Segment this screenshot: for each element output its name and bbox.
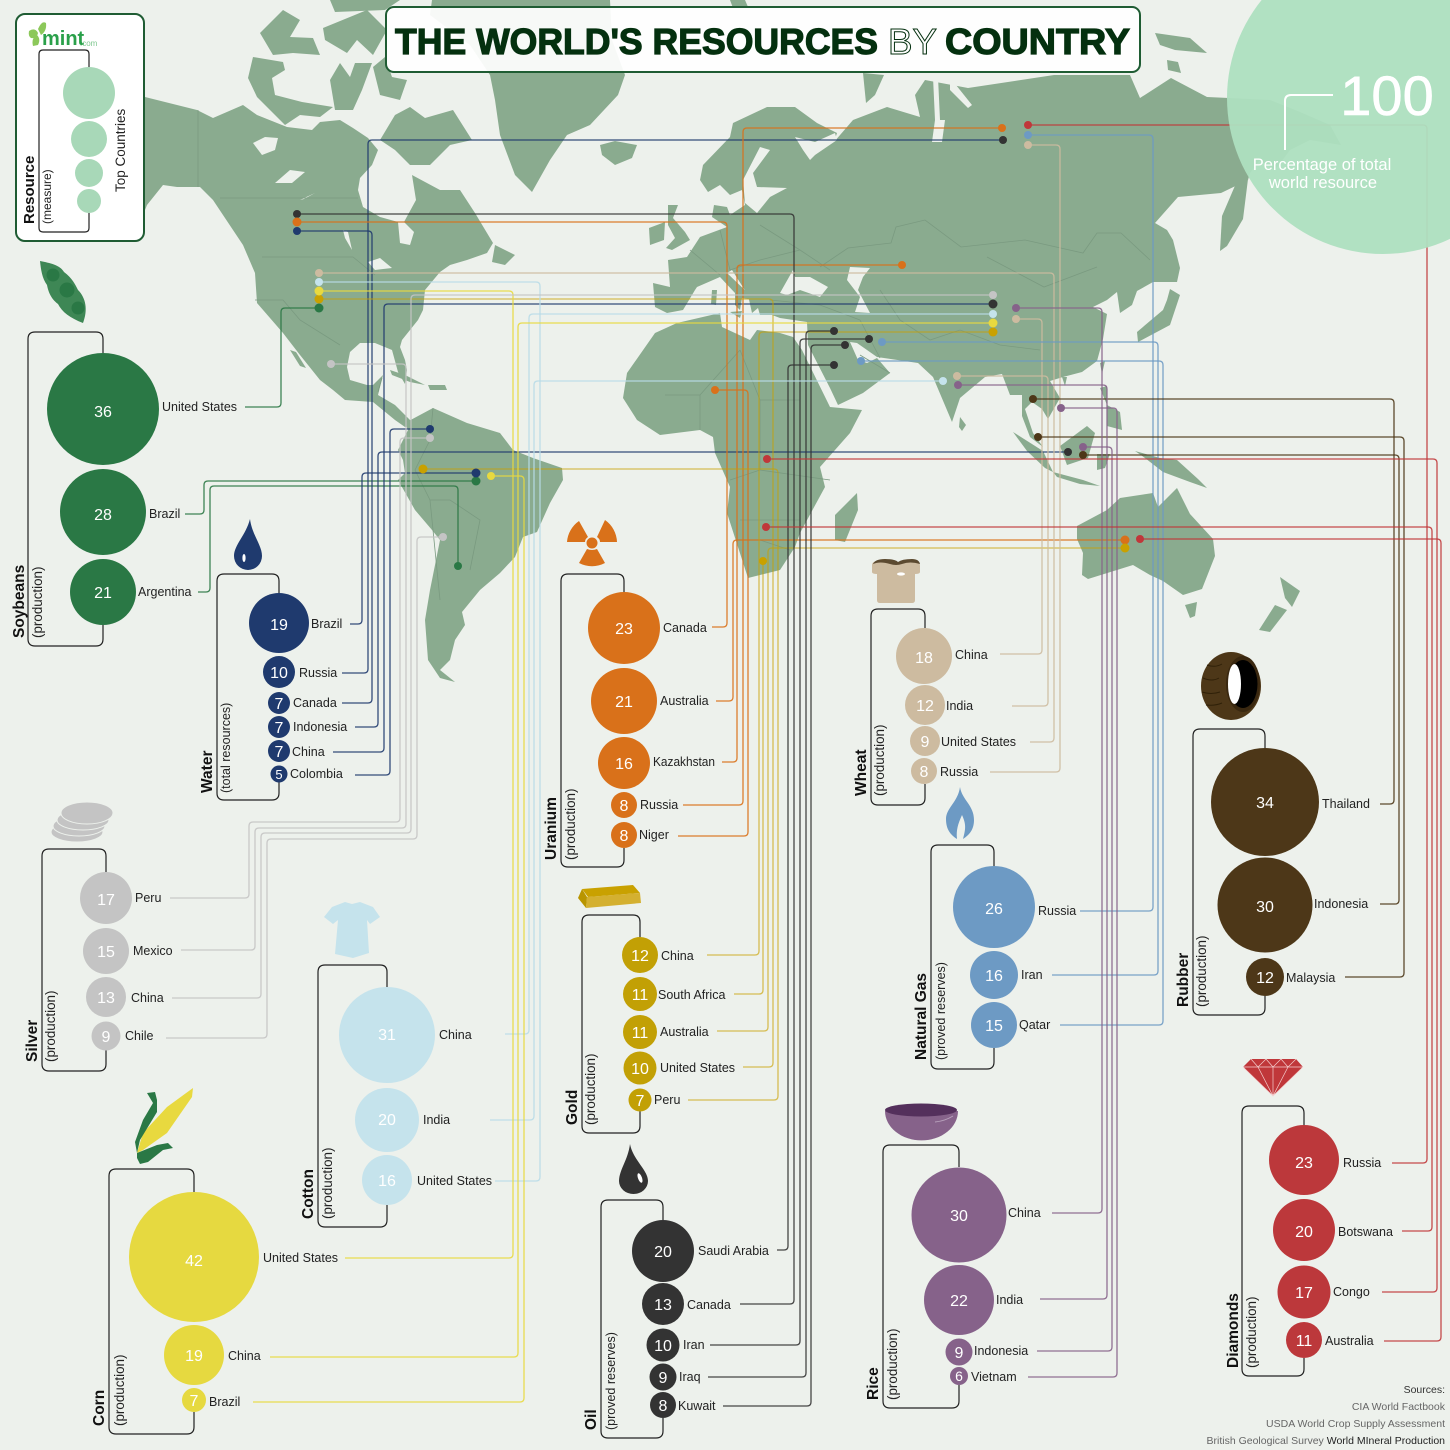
- heading: Water: [199, 750, 216, 793]
- bubble: Russia 23: Russia: [1343, 1156, 1381, 1170]
- bubble: Niger 8: 8: [620, 828, 629, 845]
- legend labels: (measure): [40, 169, 54, 224]
- heading: [853, 725, 887, 796]
- bubble: Kuwait 8: Kuwait: [678, 1399, 716, 1413]
- bubble: Brazil 7: [182, 1388, 240, 1412]
- bubble: Canada 23: 23: [615, 621, 633, 638]
- bubble: Botswana 20: Botswana: [1338, 1225, 1393, 1239]
- bubble: Russia 8: 8: [620, 798, 629, 815]
- bubble: South Africa 11: South Africa: [658, 988, 725, 1002]
- bubble: Saudi Arabia 20: Saudi Arabia: [698, 1244, 769, 1258]
- title: BY: [888, 21, 937, 62]
- heading: (production): [30, 567, 45, 638]
- bracket: [318, 965, 387, 1227]
- bubble: Russia 26: [953, 866, 1076, 948]
- logo: mint.com: [29, 22, 98, 50]
- title: COUNTRY: [945, 21, 1130, 62]
- bubble: Indonesia 30: 30: [1256, 899, 1274, 916]
- heading: (production): [1244, 1297, 1259, 1368]
- bubble: India 12: India: [946, 699, 973, 713]
- bubble: Russia 8: Russia: [940, 765, 978, 779]
- connector lines: oil: [297, 214, 869, 1406]
- heading: (production): [872, 725, 887, 796]
- bubble: Qatar 15: [971, 1002, 1050, 1048]
- bracket: [883, 1145, 959, 1408]
- bubble: South Africa 11: [623, 977, 725, 1011]
- panel: rubber: [1175, 652, 1370, 1015]
- heading: (production): [583, 1054, 598, 1125]
- bubble: Qatar 15: 15: [985, 1018, 1003, 1035]
- bubble: Brazil 19: 19: [270, 617, 288, 634]
- bubble: China 30: 30: [950, 1208, 968, 1225]
- bubble: Argentina 21: [70, 559, 192, 625]
- bubble: China 12: China: [661, 949, 694, 963]
- heading: Uranium: [543, 797, 560, 860]
- bracket: [28, 332, 103, 646]
- legend bubbles: [63, 67, 115, 213]
- bubble: Indonesia 30: [1218, 858, 1368, 952]
- panel: soybeans: [11, 261, 237, 646]
- bubble: Congo 17: 17: [1295, 1285, 1313, 1302]
- bubble: Russia 10: [263, 656, 337, 688]
- bracket: [871, 609, 925, 805]
- heading: Soybeans: [11, 565, 28, 638]
- bubble: Australia 21: 21: [615, 694, 633, 711]
- bubble: China 12: 12: [631, 948, 649, 965]
- connector lines: diamonds: [766, 125, 1441, 1341]
- heading: (production): [43, 991, 58, 1062]
- panel: cotton: [300, 902, 492, 1227]
- bubble: Mexico 15: 15: [97, 944, 115, 961]
- bubble: United States 10: 10: [631, 1061, 649, 1078]
- bubble: Russia 8: [611, 792, 678, 818]
- heading: (total resources): [219, 703, 233, 793]
- panel: rice: [865, 1104, 1041, 1408]
- bubble: Vietnam 6: Vietnam: [971, 1370, 1017, 1384]
- bubble: China 30: China: [1008, 1206, 1041, 1220]
- connector lines: wheat: [319, 145, 1060, 772]
- panel: gold: [564, 885, 735, 1133]
- bubble: Australia 11: [1286, 1322, 1374, 1358]
- legend card: [16, 14, 144, 241]
- heading: [300, 1148, 335, 1219]
- icon: diamond: [1243, 1059, 1303, 1096]
- bubble: China 13: China: [131, 991, 164, 1005]
- bubble: United States 9: 9: [921, 734, 930, 751]
- panel: oil: [583, 1144, 769, 1438]
- bubble: Iran 10: Iran: [683, 1338, 705, 1352]
- bubble: Russia 23: 23: [1295, 1155, 1313, 1172]
- heading: Diamonds: [1225, 1293, 1242, 1368]
- bubble: Australia 11: 11: [1296, 1333, 1312, 1350]
- bubble: China 7: [268, 740, 325, 762]
- sources: Sources:: [1404, 1384, 1445, 1396]
- bubble: Chile 9: 9: [102, 1029, 111, 1046]
- bubble: Peru 17: [80, 872, 161, 924]
- bubble: Canada 7: [268, 692, 337, 714]
- legend labels: Resource: [21, 156, 38, 224]
- bubble: Brazil 7: 7: [190, 1393, 199, 1410]
- bubble: Malaysia 12: [1246, 958, 1335, 996]
- bubble: Kazakhstan 16: 16: [615, 756, 633, 773]
- bubble: China 19: China: [228, 1349, 261, 1363]
- bubble: India 22: [924, 1265, 1023, 1335]
- bubble: Canada 13: 13: [654, 1297, 672, 1314]
- heading: (production): [1194, 936, 1209, 1007]
- bubble: India 12: [905, 685, 973, 725]
- bubble: Colombia 5: [270, 766, 343, 782]
- bracket: [42, 849, 106, 1071]
- legend circle: 100 percent scale: 100: [1340, 64, 1434, 127]
- bubble: China 12: [622, 937, 694, 973]
- bracket: [217, 574, 279, 800]
- panel: diamonds: [1225, 1059, 1393, 1376]
- bubble: India 20: India: [423, 1113, 450, 1127]
- bubble: Russia 10: 10: [270, 665, 288, 682]
- icon: tire: [1201, 652, 1261, 720]
- title: [386, 7, 1140, 72]
- bubble: Brazil 19: Brazil: [311, 617, 342, 631]
- bubble: South Africa 11: 11: [632, 987, 648, 1004]
- connector lines: uranium: [297, 128, 1125, 836]
- connector lines: cotton: [319, 282, 993, 1181]
- bubble: Iran 16: 16: [985, 968, 1003, 985]
- panel: silver: [24, 802, 173, 1071]
- bracket: [601, 1200, 663, 1438]
- map location dots: [292, 121, 1144, 570]
- bubble: Australia 11: 11: [632, 1025, 648, 1042]
- world map: [145, 0, 1341, 682]
- bubble: China 7: 7: [275, 744, 284, 761]
- connector lines: soybeans: [185, 308, 476, 592]
- bubble: Malaysia 12: Malaysia: [1286, 971, 1335, 985]
- bubble: United States 9: [910, 726, 1016, 756]
- bubble: Russia 8: 8: [920, 764, 929, 781]
- bubble: Mexico 15: [83, 928, 173, 974]
- legend bracket: [39, 50, 89, 232]
- bubble: United States 42: [129, 1192, 338, 1322]
- bubble: Niger 8: [611, 822, 669, 848]
- heading: (production): [563, 789, 578, 860]
- bubble: Kazakhstan 16: Kazakhstan: [653, 755, 715, 769]
- heading: [1175, 936, 1209, 1007]
- bubble: China 31: China: [439, 1028, 472, 1042]
- bubble: Russia 10: Russia: [299, 666, 337, 680]
- heading: (production): [885, 1329, 900, 1400]
- legend circle: 100 percent scale: [1227, 0, 1450, 254]
- legend labels: [21, 108, 128, 224]
- bubble: Argentina 21: Argentina: [138, 585, 192, 599]
- bracket: [561, 574, 624, 867]
- bubble: Vietnam 6: [950, 1367, 1017, 1385]
- sources: British Geological Survey World MIneral Production: [1206, 1435, 1445, 1447]
- bubble: Malaysia 12: 12: [1256, 970, 1274, 987]
- bubble: India 22: 22: [950, 1293, 968, 1310]
- bubble: Canada 7: 7: [275, 696, 284, 713]
- bubble: Iraq 9: 9: [659, 1370, 668, 1387]
- bubble: India 22: India: [996, 1293, 1023, 1307]
- bubble: Australia 21: [591, 668, 709, 734]
- bubble: China 30: [912, 1168, 1041, 1262]
- bubble: Chile 9: [92, 1022, 154, 1050]
- bubble: Mexico 15: Mexico: [133, 944, 173, 958]
- heading: (production): [112, 1355, 127, 1426]
- bubble: China 31: [339, 987, 472, 1083]
- bubble: China 18: [896, 628, 988, 684]
- bubble: Australia 11: Australia: [1325, 1334, 1374, 1348]
- title: THE WORLD'S RESOURCES: [395, 21, 878, 62]
- bubble: Indonesia 7: 7: [275, 720, 284, 737]
- icon: bread: [872, 559, 920, 603]
- bubble: Vietnam 6: 6: [955, 1368, 963, 1384]
- connector lines: water: [297, 140, 1068, 775]
- bubble: Russia 26: 26: [985, 901, 1003, 918]
- legend circle: 100 percent scale: world resource: [1268, 174, 1377, 192]
- icon: gas flame: [946, 787, 974, 839]
- bubble: Congo 17: Congo: [1333, 1285, 1370, 1299]
- heading: Silver: [24, 1020, 41, 1062]
- bubble: Iraq 9: Iraq: [679, 1370, 701, 1384]
- bubble: Thailand 34: 34: [1256, 795, 1274, 812]
- heading: [24, 991, 58, 1062]
- bubble: Chile 9: Chile: [125, 1029, 154, 1043]
- connector lines: corn: [253, 291, 993, 1402]
- bubble: United States 36: [47, 353, 237, 465]
- bubble: Thailand 34: Thailand: [1322, 797, 1370, 811]
- bubble: United States 36: 36: [94, 404, 112, 421]
- bubble: Thailand 34: [1211, 748, 1370, 856]
- bubble: Botswana 20: 20: [1295, 1224, 1313, 1241]
- sources: USDA World Crop Supply Assessment: [1266, 1418, 1445, 1430]
- bubble: Canada 13: [642, 1283, 731, 1325]
- bubble: Colombia 5: 5: [275, 767, 283, 782]
- connector lines: rubber: [1033, 399, 1404, 977]
- bubble: Russia 8: [911, 758, 978, 784]
- icon: rice bowl: [885, 1104, 958, 1140]
- heading: Corn: [91, 1390, 108, 1426]
- panel: corn: [91, 1088, 338, 1434]
- bubble: Argentina 21: 21: [94, 585, 112, 602]
- heading: [564, 1054, 598, 1125]
- icon: silver coins: [51, 802, 113, 842]
- legend circle: 100 percent scale: Percentage of total: [1253, 156, 1391, 174]
- bubble: Peru 7: Peru: [654, 1093, 680, 1107]
- heading: [1225, 1293, 1259, 1368]
- bubble: China 31: 31: [378, 1027, 396, 1044]
- sources: [1206, 1384, 1446, 1447]
- connector lines: rice: [958, 308, 1117, 1377]
- bubble: Colombia 5: Colombia: [290, 767, 343, 781]
- bracket: [109, 1169, 194, 1434]
- bubble: Peru 17: Peru: [135, 891, 161, 905]
- bubble: Botswana 20: [1273, 1199, 1393, 1261]
- connector lines: natural gas: [861, 135, 1163, 1025]
- heading: Gold: [564, 1090, 581, 1125]
- bubble: Saudi Arabia 20: [632, 1220, 769, 1282]
- bubble: United States 10: [624, 1052, 735, 1084]
- heading: [913, 962, 948, 1060]
- logo: mint.com: .com: [80, 39, 98, 48]
- bubble: United States 9: United States: [941, 735, 1016, 749]
- bubble: Brazil 28: [60, 469, 180, 555]
- bubble: Brazil 19: [249, 593, 342, 653]
- bubble: Canada 13: Canada: [687, 1298, 731, 1312]
- heading: [91, 1355, 127, 1426]
- heading: Cotton: [300, 1169, 317, 1219]
- bubble: Iran 10: [646, 1328, 705, 1362]
- bubble: Saudi Arabia 20: 20: [654, 1244, 672, 1261]
- bubble: China 13: 13: [97, 990, 115, 1007]
- bubble: Australia 21: Australia: [660, 694, 709, 708]
- bubble: Russia 23: [1269, 1125, 1381, 1195]
- bubble: Peru 17: 17: [97, 892, 115, 909]
- icon: radiation symbol: [567, 520, 617, 566]
- bubble: India 12: 12: [916, 698, 934, 715]
- bracket: [931, 845, 994, 1069]
- bubble: United States 36: United States: [162, 400, 237, 414]
- icon: gold bar: [578, 885, 641, 908]
- bracket: [1193, 729, 1265, 1015]
- bubble: China 19: 19: [185, 1348, 203, 1365]
- bubble: Australia 11: [623, 1015, 709, 1049]
- connector lines: silver: [166, 295, 993, 1038]
- bubble: Iran 16: Iran: [1021, 968, 1043, 982]
- icon: t-shirt: [324, 902, 380, 958]
- heading: (proved reserves): [934, 962, 948, 1060]
- heading: [865, 1329, 900, 1400]
- bubble: Indonesia 30: Indonesia: [1314, 897, 1368, 911]
- panel: natural gas: [913, 787, 1076, 1069]
- bubble: China 13: [86, 977, 164, 1017]
- heading: (proved reserves): [604, 1332, 618, 1430]
- bubble: India 20: 20: [378, 1112, 396, 1129]
- heading: Natural Gas: [913, 973, 930, 1060]
- icon: corn cob: [135, 1088, 193, 1164]
- connector lines: gold: [319, 299, 1125, 1100]
- bubble: China 19: [164, 1325, 261, 1385]
- heading: (production): [320, 1148, 335, 1219]
- bubble: Kuwait 8: [650, 1392, 716, 1418]
- bubble: Canada 23: [588, 592, 707, 664]
- bubble: China 18: China: [955, 648, 988, 662]
- bubble: Qatar 15: Qatar: [1019, 1018, 1050, 1032]
- bubble: Iran 16: [970, 951, 1043, 999]
- bubble: United States 42: 42: [185, 1253, 203, 1270]
- heading: Oil: [583, 1409, 600, 1430]
- bubble: Peru 7: 7: [636, 1093, 645, 1110]
- bubble: Russia 26: Russia: [1038, 904, 1076, 918]
- bubble: United States 16: [362, 1155, 492, 1205]
- bracket: [582, 915, 640, 1133]
- bubble: Kuwait 8: 8: [659, 1398, 668, 1415]
- bubble: Congo 17: [1278, 1266, 1370, 1318]
- panel: wheat: [853, 559, 1016, 805]
- logo: mint.com: mint: [42, 28, 85, 50]
- icon: oil drop: [619, 1144, 648, 1194]
- bubble: Brazil 7: Brazil: [209, 1395, 240, 1409]
- heading: Rubber: [1175, 953, 1192, 1007]
- bubble: United States 16: United States: [417, 1174, 492, 1188]
- bubble: Indonesia 9: Indonesia: [974, 1344, 1028, 1358]
- bubble: Australia 11: Australia: [660, 1025, 709, 1039]
- bubble: Iraq 9: [650, 1364, 701, 1390]
- bubble: Brazil 28: Brazil: [149, 507, 180, 521]
- sources: CIA World Factbook: [1352, 1401, 1446, 1413]
- bubble: United States 42: United States: [263, 1251, 338, 1265]
- panel: water: [199, 519, 347, 800]
- heading: [199, 703, 233, 793]
- bubble: United States 10: United States: [660, 1061, 735, 1075]
- heading: Rice: [865, 1367, 882, 1400]
- bubble: Canada 7: Canada: [293, 696, 337, 710]
- bubble: United States 16: 16: [378, 1173, 396, 1190]
- bubble: Kazakhstan 16: [598, 737, 715, 789]
- heading: [11, 565, 45, 638]
- bubble: Brazil 28: 28: [94, 507, 112, 524]
- icon: soybean pod: [40, 261, 86, 323]
- heading: [583, 1332, 618, 1430]
- bubble: China 18: 18: [915, 650, 933, 667]
- bubble: Canada 23: Canada: [663, 621, 707, 635]
- bubble: Indonesia 7: Indonesia: [293, 720, 347, 734]
- bubble: Indonesia 9: [946, 1338, 1028, 1366]
- legend labels: Top Countries: [113, 108, 128, 192]
- panel: uranium: [543, 520, 715, 867]
- bubble: India 20: [355, 1088, 450, 1152]
- icon: water drop: [234, 519, 262, 570]
- bubble: China 7: China: [292, 745, 325, 759]
- bubble: Iran 10: 10: [654, 1338, 672, 1355]
- heading: [543, 789, 578, 860]
- bubble: Russia 8: Russia: [640, 798, 678, 812]
- bubble: Niger 8: Niger: [639, 828, 669, 842]
- bubble: Peru 7: [628, 1088, 680, 1112]
- bubble: Indonesia 7: [268, 716, 347, 738]
- bracket: [1242, 1106, 1304, 1376]
- heading: Wheat: [853, 750, 870, 796]
- bubble: Indonesia 9: 9: [955, 1345, 964, 1362]
